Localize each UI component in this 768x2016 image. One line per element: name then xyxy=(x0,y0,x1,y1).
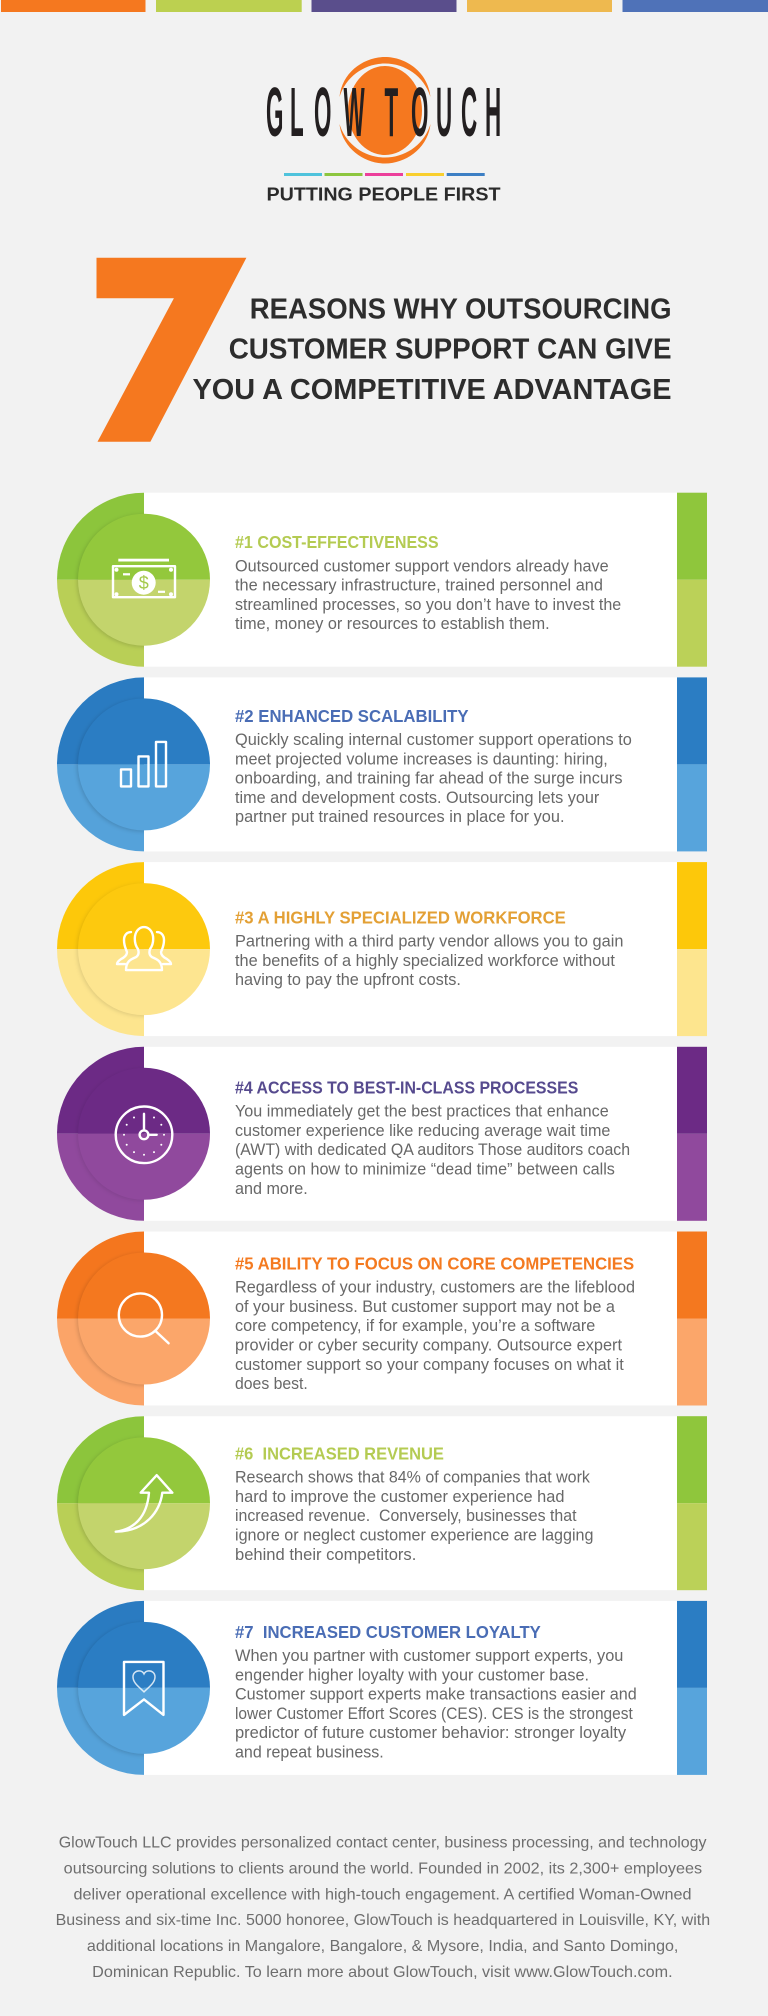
footer text block: deliver operational excellence with high-touch engagement. A certified Woman-Owned xyxy=(74,1886,692,1903)
body text: partner put trained resources in place for you. xyxy=(235,808,564,826)
body text: and repeat business. xyxy=(235,1743,384,1761)
colour tab xyxy=(677,493,707,667)
title xyxy=(192,293,672,406)
body text: behind their competitors. xyxy=(235,1546,416,1564)
colour tab xyxy=(677,1232,707,1406)
heading: #6 INCREASED REVENUE xyxy=(235,1443,444,1463)
icon: bar chart xyxy=(121,742,166,786)
body text: agents on how to minimize “dead time” between calls xyxy=(235,1160,615,1178)
panel: #7 increased customer loyalty xyxy=(57,1601,707,1775)
colour tab xyxy=(677,1047,707,1221)
panel: #3 a highly specialized workforce xyxy=(57,862,707,1036)
body text: lower Customer Effort Scores (CES). CES is the strongest xyxy=(235,1705,633,1723)
body text xyxy=(235,1103,630,1198)
body text: Outsourced customer support vendors already have xyxy=(235,557,609,575)
body text: onboarding, and training far ahead of the surge incurs xyxy=(235,770,622,788)
body text: Regardless of your industry, customers are the lifeblood xyxy=(235,1279,635,1297)
body text xyxy=(235,1279,635,1393)
panel: #1 cost-effectiveness xyxy=(57,493,707,667)
body text: Quickly scaling internal customer support operations to xyxy=(235,731,632,749)
body text: meet projected volume increases is daunting: hiring, xyxy=(235,750,608,768)
panel: #2 enhanced scalability xyxy=(57,677,707,851)
title: REASONS WHY OUTSOURCING xyxy=(250,293,672,325)
badge circle xyxy=(57,862,210,1036)
badge circle xyxy=(57,1601,210,1775)
body text: does best. xyxy=(235,1375,308,1393)
card background xyxy=(144,1416,677,1590)
colour tab xyxy=(677,862,707,1036)
badge circle xyxy=(57,677,210,851)
panel: #4 access to best-in-class processes xyxy=(57,1047,707,1221)
body text xyxy=(235,557,621,633)
logo tagline: PUTTING PEOPLE FIRST xyxy=(266,184,501,205)
body text xyxy=(235,1469,594,1564)
body text: of your business. But customer support may not be a xyxy=(235,1298,616,1316)
body text: engender higher loyalty with your customer base. xyxy=(235,1666,589,1684)
heading: #7 INCREASED CUSTOMER LOYALTY xyxy=(235,1622,541,1642)
body text: core competency, if for example, you’re a software xyxy=(235,1317,595,1335)
badge circle xyxy=(57,1416,210,1590)
body text: having to pay the upfront costs. xyxy=(235,971,461,989)
body text: increased revenue. Conversely, businesses that xyxy=(235,1507,577,1525)
body text: the benefits of a highly specialized workforce without xyxy=(235,952,615,970)
body text: time and development costs. Outsourcing lets your xyxy=(235,789,600,807)
panel: #6 increased revenue xyxy=(57,1416,707,1590)
body text: When you partner with customer support experts, you xyxy=(235,1647,623,1665)
footer text block: additional locations in Mangalore, Bangalore, & Mysore, India, and Santo Domingo, xyxy=(87,1938,678,1955)
footer text block: Dominican Republic. To learn more about GlowTouch, visit www.GlowTouch.com. xyxy=(92,1964,673,1981)
body text: hard to improve the customer experience had xyxy=(235,1488,564,1506)
icon: three people xyxy=(117,927,171,970)
body text: Customer support experts make transactions easier and xyxy=(235,1686,637,1704)
body text: the necessary infrastructure, trained personnel and xyxy=(235,577,603,595)
title: CUSTOMER SUPPORT CAN GIVE xyxy=(229,334,671,366)
body text: streamlined processes, so you don’t have to invest the xyxy=(235,596,621,614)
body text: Partnering with a third party vendor allows you to gain xyxy=(235,933,623,951)
icon: banknote xyxy=(113,559,175,597)
badge circle xyxy=(57,1232,210,1406)
body text: predictor of future customer behavior: stronger loyalty xyxy=(235,1724,627,1742)
body text xyxy=(235,1647,637,1761)
logo wordmark: GLOWTOUCH xyxy=(266,74,501,152)
footer text block: outsourcing solutions to clients around the world. Founded in 2002, its 2,300+ employees xyxy=(64,1860,702,1877)
card background xyxy=(144,493,677,667)
footer text block: Business and six-time Inc. 5000 honoree, GlowTouch is headquartered in Louisville, KY, with xyxy=(56,1912,710,1929)
body text: (AWT) with dedicated QA auditors Those auditors coach xyxy=(235,1141,630,1159)
body text xyxy=(235,933,623,989)
top colour bars xyxy=(1,0,768,12)
body text: and more. xyxy=(235,1180,308,1198)
icon: rising arrow xyxy=(116,1475,172,1532)
panel: #5 ability to focus on core competencies xyxy=(57,1232,707,1406)
logo rainbow rule xyxy=(284,173,485,176)
colour tab xyxy=(677,677,707,851)
body text: customer support so your company focuses on what it xyxy=(235,1356,624,1374)
title: YOU A COMPETITIVE ADVANTAGE xyxy=(192,374,672,406)
body text: You immediately get the best practices that enhance xyxy=(235,1103,609,1121)
heading: #1 COST-EFFECTIVENESS xyxy=(235,532,439,552)
card background xyxy=(144,862,677,1036)
heading: #2 ENHANCED SCALABILITY xyxy=(235,706,469,726)
card background xyxy=(144,1047,677,1221)
footer text block: GlowTouch LLC provides personalized contact center, business processing, and technology xyxy=(59,1834,707,1852)
icon: banknote: $ xyxy=(139,573,149,593)
icon: bookmark with heart xyxy=(124,1662,164,1715)
icon: magnifying glass xyxy=(119,1293,169,1343)
body text: ignore or neglect customer experience are lagging xyxy=(235,1526,594,1544)
heading: #5 ABILITY TO FOCUS ON CORE COMPETENCIES xyxy=(235,1253,634,1273)
badge circle xyxy=(57,493,210,667)
colour tab xyxy=(677,1601,707,1775)
body text: provider or cyber security company. Outsource expert xyxy=(235,1336,622,1354)
body text xyxy=(235,731,632,826)
card background xyxy=(144,1232,677,1406)
badge circle xyxy=(57,1047,210,1221)
colour tab xyxy=(677,1416,707,1590)
big number seven xyxy=(96,258,246,442)
heading: #4 ACCESS TO BEST-IN-CLASS PROCESSES xyxy=(235,1078,578,1098)
footer text block xyxy=(56,1834,710,1981)
heading: #3 A HIGHLY SPECIALIZED WORKFORCE xyxy=(235,907,566,927)
body text: time, money or resources to establish them. xyxy=(235,615,550,633)
body text: customer experience like reducing average wait time xyxy=(235,1122,610,1140)
logo emblem: orange disc with crescents xyxy=(340,57,430,164)
logo: GlowTouch xyxy=(266,57,501,205)
card background xyxy=(144,1601,677,1775)
icon: clock xyxy=(116,1106,172,1163)
card background xyxy=(144,677,677,851)
body text: Research shows that 84% of companies that work xyxy=(235,1469,591,1487)
